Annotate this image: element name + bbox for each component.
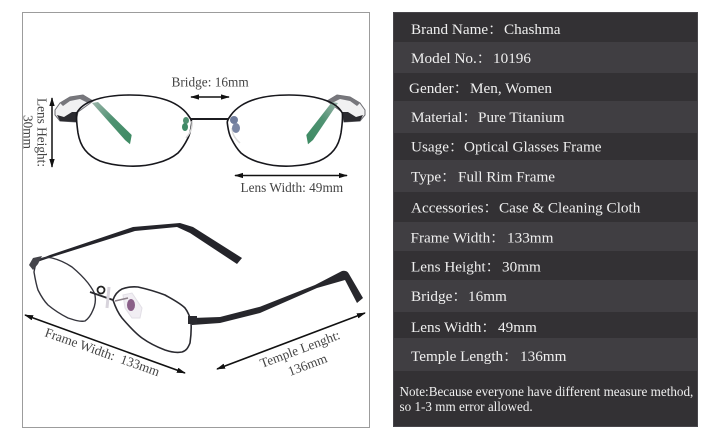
label: bridge: Bridge: 16mm <box>172 74 249 90</box>
row: model number <box>394 42 697 73</box>
left nose pad <box>182 117 192 138</box>
bridge and nose pads <box>90 286 142 318</box>
note <box>400 384 693 414</box>
arrow: frame width <box>25 315 185 373</box>
row: temple length: 136mm <box>520 348 567 365</box>
row: usage <box>394 133 697 160</box>
row: bridge: Bridge： <box>411 288 468 305</box>
row: lens width <box>394 312 697 338</box>
note: Note:Because everyone have different measure method, <box>400 384 693 399</box>
left temple tip seen through lens <box>92 102 132 144</box>
row: material <box>394 101 697 133</box>
arrow: bridge <box>191 96 229 98</box>
arrow: temple length <box>217 313 365 369</box>
glasses: angled view <box>29 223 363 352</box>
row: lens width: 49mm <box>498 319 537 336</box>
row: frame width: 133mm <box>507 230 554 246</box>
row: lens width: Lens Width： <box>411 319 497 336</box>
row: usage: Optical Glasses Frame <box>464 138 602 156</box>
row: brand name: Chashma <box>504 21 561 38</box>
near hinge <box>188 316 197 324</box>
far lens rim <box>34 257 95 321</box>
row: model number: Model No.： <box>411 50 492 67</box>
far hinge <box>29 256 42 270</box>
row: temple length: Temple Length： <box>411 348 518 365</box>
row: usage: Usage： <box>411 138 464 156</box>
row: material: Material： <box>411 109 478 126</box>
row: model number: 10196 <box>493 50 531 67</box>
arrow: lens width <box>235 174 347 176</box>
label: lens width: Lens Width: 49mm <box>240 180 344 195</box>
row: brand name <box>394 13 697 42</box>
right hinge and temple <box>327 95 365 122</box>
row: gender: Gender： <box>409 80 469 97</box>
row: type: Type： <box>411 168 456 186</box>
far temple <box>30 223 242 264</box>
right temple tip seen through lens <box>306 102 338 144</box>
row: gender: Men, Women <box>470 80 552 97</box>
left lens rim <box>76 95 192 166</box>
row: bridge <box>394 280 697 312</box>
row: accessories <box>394 192 697 222</box>
near temple <box>192 271 363 325</box>
left hinge and temple <box>55 95 93 122</box>
row: lens height: Lens Height： <box>411 258 501 276</box>
label: lens height: 30mm <box>20 115 36 150</box>
note: so 1-3 mm error allowed. <box>400 399 533 414</box>
right lens rim <box>227 95 343 166</box>
panel: specifications table <box>393 12 698 427</box>
row: accessories: Accessories： <box>411 200 499 216</box>
near lens rim <box>113 287 191 352</box>
bridge <box>191 118 228 120</box>
panel: glasses dimensions <box>20 12 370 428</box>
row: brand name: Brand Name： <box>411 21 503 38</box>
row: type <box>394 160 697 192</box>
row: note background <box>394 371 697 426</box>
row: frame width <box>394 222 697 251</box>
row: material: Pure Titanium <box>478 109 565 126</box>
row: gender <box>394 73 697 101</box>
label: temple length: 136mm <box>286 350 330 379</box>
row: type: Full Rim Frame <box>458 168 555 186</box>
arrow: lens height <box>51 98 53 167</box>
row: accessories: Case & Cleaning Cloth <box>499 200 641 216</box>
glasses: front view <box>55 95 365 166</box>
label: temple length: Temple Lenght: <box>258 327 342 371</box>
row: temple length <box>394 338 697 371</box>
row: frame width: Frame Width： <box>410 230 505 246</box>
row: lens height: 30mm <box>502 258 541 276</box>
row: bridge: 16mm <box>468 288 507 305</box>
label: lens height <box>20 98 50 167</box>
label: lens height: Lens Height: <box>34 98 50 167</box>
label: frame width: Frame Width: 133mm <box>43 325 162 379</box>
row: lens height <box>394 251 697 280</box>
right nose pad <box>230 116 240 143</box>
